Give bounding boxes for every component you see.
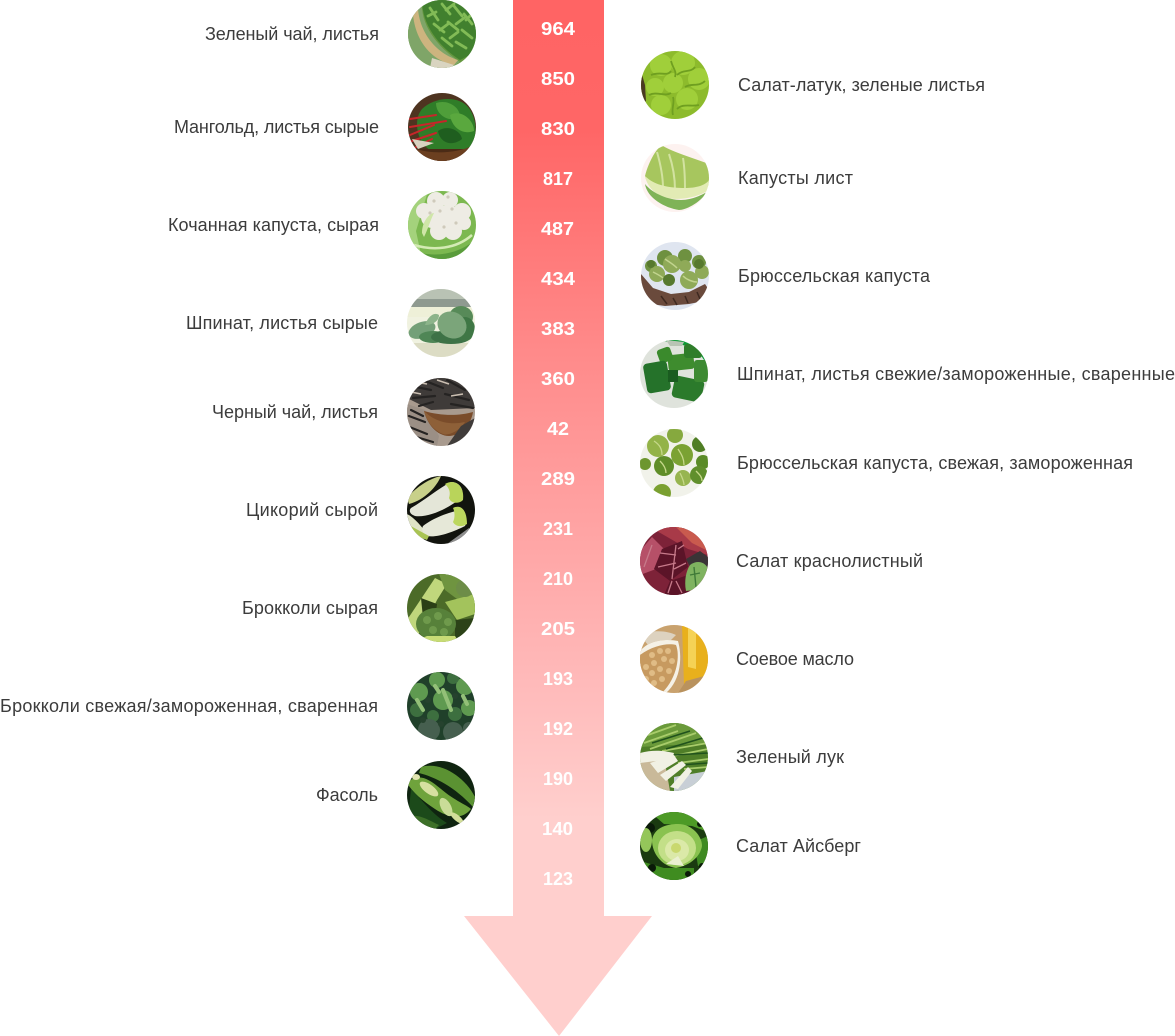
item: cauliflower: [168, 191, 476, 259]
arrow values: 190: [543, 769, 573, 789]
arrow values: 850: [541, 69, 575, 89]
item: cooked broccoli: [0, 672, 477, 742]
item: fresh brussels sprouts: [639, 427, 1133, 502]
icon: cooked broccoli: [407, 672, 477, 742]
item: raw broccoli: [242, 574, 475, 642]
item: lettuce: Салат-латук, зеленые листья: [738, 75, 985, 95]
icon: beans: [407, 761, 475, 829]
arrow values: 289: [541, 469, 575, 489]
item: black tea: [212, 378, 475, 446]
item: beans: Фасоль: [316, 785, 378, 805]
item: cabbage leaf: Капусты лист: [738, 168, 853, 188]
icon: green onion: [640, 723, 708, 791]
icon: cabbage leaf: [641, 144, 709, 212]
item: iceberg lettuce: Салат Айсберг: [736, 836, 861, 856]
item: chard: [174, 93, 476, 161]
item: frozen spinach: Шпинат, листья свежие/замороженные, сваренные: [737, 364, 1175, 384]
item: green tea: [205, 0, 476, 70]
item: green tea: Зеленый чай, листья: [205, 24, 379, 44]
arrow values: 487: [541, 219, 574, 239]
arrow scale: [464, 0, 652, 1036]
arrow values: 830: [541, 119, 575, 139]
arrow values: 192: [543, 719, 573, 739]
item: chicory: [246, 476, 475, 544]
item: spinach: [186, 289, 475, 357]
icon: spinach: [406, 289, 475, 357]
item: green onion: Зеленый лук: [736, 747, 844, 767]
item: green onion: [640, 723, 844, 791]
item: soybean oil: [640, 625, 854, 693]
arrow values: 140: [542, 819, 573, 839]
icon: chard: [408, 93, 476, 161]
arrow values: 964: [541, 19, 575, 39]
item: red lettuce: [640, 527, 923, 595]
item: black tea: Черный чай, листья: [212, 402, 378, 422]
item: iceberg lettuce: [640, 812, 861, 880]
item: raw broccoli: Брокколи сырая: [242, 598, 378, 618]
icon: green tea: [408, 0, 476, 70]
icon: brussels sprouts in hands: [641, 242, 709, 310]
item: frozen spinach: [640, 340, 1175, 408]
icon: iceberg lettuce: [640, 812, 708, 880]
icon: fresh brussels sprouts: [640, 429, 708, 497]
item: cooked broccoli: Брокколи свежая/замороженная, сваренная: [0, 696, 378, 716]
arrow values: 360: [541, 369, 575, 389]
arrow values: 210: [543, 569, 573, 589]
arrow values: [541, 19, 575, 889]
arrow values: 231: [543, 519, 573, 539]
item: fresh brussels sprouts: Брюссельская капуста, свежая, замороженная: [737, 453, 1133, 473]
item: cauliflower: Кочанная капуста, сырая: [168, 215, 379, 235]
item: beans: [316, 761, 475, 829]
arrow values: 383: [541, 319, 575, 339]
icon: chicory: [407, 476, 475, 544]
icon: frozen spinach: [640, 340, 708, 408]
item: cabbage leaf: [641, 144, 853, 212]
item: red lettuce: Салат краснолистный: [736, 551, 923, 571]
arrow values: 205: [541, 619, 575, 639]
icon: lettuce: [641, 51, 710, 119]
icon: cauliflower: [408, 191, 476, 259]
icon: soybean oil: [640, 625, 708, 693]
item: brussels sprouts: Брюссельская капуста: [738, 266, 931, 286]
arrow values: 193: [543, 669, 573, 689]
item: chard: Мангольд, листья сырые: [174, 117, 379, 137]
arrow values: 42: [547, 419, 569, 439]
arrow values: 817: [543, 169, 573, 189]
item: brussels sprouts: [641, 242, 931, 310]
arrow values: 123: [543, 869, 573, 889]
item: spinach: Шпинат, листья сырые: [186, 313, 378, 333]
item: lettuce: [641, 51, 985, 119]
icon: red lettuce: [640, 527, 708, 595]
arrow values: 434: [541, 269, 575, 289]
item: soybean oil: Соевое масло: [736, 649, 854, 669]
icon: black tea: [407, 378, 475, 446]
arrow body: [464, 0, 652, 1036]
item: chicory: Цикорий сырой: [246, 500, 378, 520]
icon: raw broccoli: [407, 574, 475, 642]
